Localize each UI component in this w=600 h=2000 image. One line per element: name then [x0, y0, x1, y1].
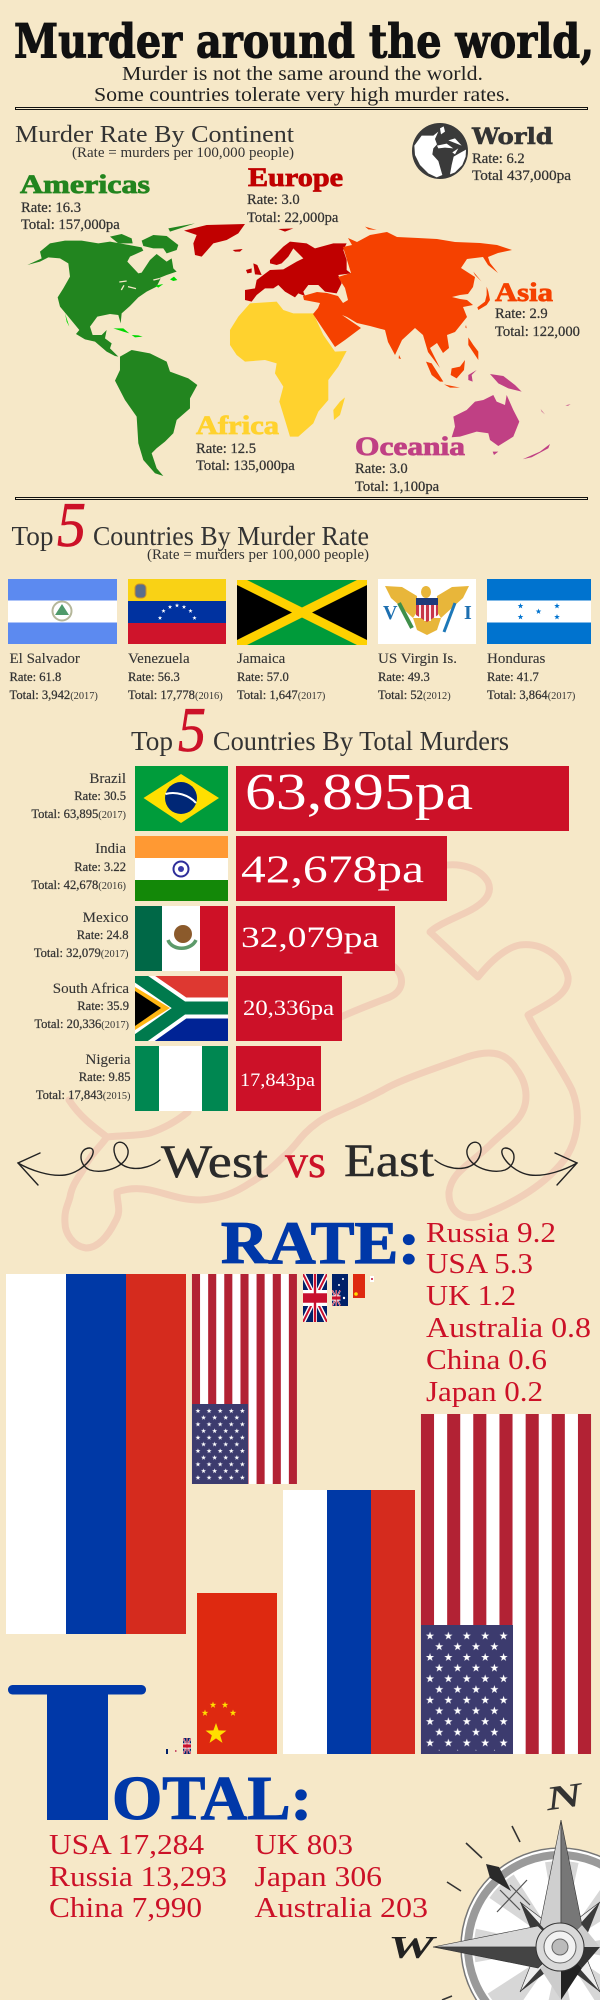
label: europe: Total: 22,000pa	[247, 210, 339, 226]
flag: nigeria	[135, 1046, 228, 1111]
label: mexico	[34, 910, 128, 960]
label: americas	[20, 170, 150, 233]
row: brazil	[31, 764, 569, 831]
bar: brazil: 63,895pa	[245, 764, 473, 821]
map: europe and africa	[184, 224, 351, 437]
list: total values: Russia 13,293	[49, 1862, 227, 1893]
stats: el salvador: El Salvador	[10, 651, 80, 667]
world stats	[471, 124, 572, 184]
label: brazil: Brazil	[89, 771, 126, 787]
stats: us virgin islands	[378, 651, 457, 702]
panel: murder rate by continent	[15, 122, 580, 495]
bar: india: 42,678pa	[241, 848, 424, 891]
stats: honduras	[487, 651, 575, 702]
label: asia: Rate: 2.9	[495, 306, 548, 322]
heading: top 5 total: 5	[178, 694, 206, 765]
label: americas: Rate: 16.3	[21, 200, 81, 216]
heading: total	[8, 1652, 312, 1862]
list: total values: Japan 306	[254, 1862, 382, 1893]
bar: india	[236, 836, 447, 901]
heading: top 5 rate: (Rate = murders per 100,000 people)	[147, 547, 369, 563]
subtitle: Some countries tolerate very high murder rates.	[94, 84, 510, 106]
world stats: World	[471, 124, 553, 150]
flag: japan rate	[370, 1276, 374, 1282]
stats: venezuela: Rate: 56.3	[128, 670, 180, 684]
label: africa: Africa	[196, 411, 279, 440]
arrow: right flourish	[435, 1142, 577, 1185]
stats: us virgin islands: Rate: 49.3	[378, 670, 430, 684]
map: americas	[27, 223, 197, 476]
label: oceania: Oceania	[355, 432, 465, 461]
icon: compass	[433, 1820, 600, 2000]
subtitle: Murder is not the same around the world.	[122, 63, 483, 85]
stats: venezuela: Total: 17,778(2016)	[128, 688, 223, 702]
heading: top 5 total: Countries By Total Murders	[213, 726, 509, 756]
flag: china rate	[353, 1274, 365, 1298]
flag: uk rate	[303, 1274, 327, 1322]
stats: honduras: Total: 3,864(2017)	[487, 688, 575, 702]
list: rate values	[426, 1218, 591, 1408]
label: asia: Asia	[495, 278, 553, 307]
label: india: Rate: 3.22	[74, 860, 126, 874]
label: africa: Rate: 12.5	[196, 441, 256, 457]
label: brazil	[31, 771, 126, 821]
bar: south africa	[236, 976, 342, 1041]
label: mexico: Mexico	[83, 910, 128, 926]
stats: el salvador: Total: 3,942(2017)	[10, 688, 98, 702]
label: brazil: Rate: 30.5	[74, 789, 126, 803]
label: mexico: Rate: 24.8	[77, 928, 128, 942]
label: americas: Americas	[20, 170, 150, 199]
label: nigeria: Total: 17,843(2015)	[36, 1088, 130, 1102]
stats: jamaica	[237, 651, 325, 702]
heading: west vs east: East	[344, 1135, 434, 1187]
stats: jamaica: Rate: 57.0	[237, 670, 289, 684]
bar: nigeria	[236, 1046, 321, 1111]
arrow: left flourish	[18, 1142, 160, 1185]
continent heading: (Rate = murders per 100,000 people)	[72, 145, 294, 161]
heading: west vs east	[161, 1135, 434, 1188]
heading: top 5 total: Top	[131, 726, 173, 756]
bar: south africa: 20,336pa	[243, 995, 334, 1020]
subtitle	[94, 63, 510, 106]
heading: west vs east: West	[161, 1136, 268, 1188]
flag: us virgin islands	[378, 579, 476, 644]
map: oceania	[452, 370, 571, 459]
label: nigeria: Rate: 9.85	[79, 1070, 130, 1084]
label: brazil: Total: 63,895(2017)	[31, 807, 126, 821]
label: south africa	[34, 981, 129, 1031]
list: rate values: China 0.6	[426, 1345, 547, 1376]
map: asia	[303, 227, 512, 388]
label: south africa: Rate: 35.9	[77, 999, 129, 1013]
world stats: Rate: 6.2	[472, 151, 525, 167]
stats: us virgin islands: US Virgin Is.	[378, 651, 457, 667]
label: asia: Total: 122,000	[495, 324, 580, 340]
label: oceania: Rate: 3.0	[355, 461, 408, 477]
icon: globe	[412, 123, 468, 179]
list: rate values: Australia 0.8	[426, 1313, 591, 1344]
compass letter N: N	[542, 1776, 587, 1818]
row: south africa	[34, 972, 342, 1045]
list: rate values: UK 1.2	[426, 1281, 516, 1312]
flag: mexico	[135, 906, 228, 971]
row: nigeria	[36, 1046, 321, 1111]
flag: uk total	[183, 1738, 191, 1754]
label: nigeria: Nigeria	[86, 1052, 131, 1068]
heading: top 5 rate: Top	[12, 521, 53, 551]
continent heading: Murder Rate By Continent	[15, 122, 294, 148]
label: europe: Europe	[248, 163, 343, 192]
list: total values: UK 803	[254, 1830, 353, 1861]
flag: india	[135, 836, 228, 901]
label: europe: Rate: 3.0	[247, 192, 300, 208]
panel: rate comparison	[6, 1210, 591, 1634]
list: total values	[49, 1830, 428, 1924]
flag: russia total	[283, 1490, 415, 1754]
world stats: Total 437,000pa	[472, 168, 572, 184]
list: total values: USA 17,284	[49, 1830, 204, 1861]
label: india	[31, 841, 126, 892]
stats: jamaica: Total: 1,647(2017)	[237, 688, 325, 702]
bar: mexico: 32,079pa	[241, 921, 379, 954]
stats: us virgin islands: Total: 52(2012)	[378, 688, 451, 702]
flag: brazil	[135, 766, 228, 831]
label: south africa: Total: 20,336(2017)	[34, 1017, 129, 1031]
flag: south africa	[131, 972, 228, 1045]
flag: australia rate	[332, 1274, 348, 1306]
flag: venezuela	[128, 579, 226, 644]
panel: total comparison	[8, 1414, 591, 1924]
list: rate values: USA 5.3	[426, 1249, 533, 1280]
continent heading	[15, 122, 294, 161]
label: nigeria	[36, 1052, 131, 1102]
label: africa: Total: 135,000pa	[196, 458, 295, 474]
bar: brazil	[236, 764, 569, 831]
row: mexico	[34, 906, 395, 971]
flag: jamaica	[237, 580, 367, 645]
bar: mexico	[236, 906, 395, 971]
compass letter W: W	[388, 1929, 438, 1965]
stats: venezuela	[128, 651, 223, 702]
map: africa	[230, 302, 347, 437]
bar: nigeria: 17,843pa	[240, 1070, 316, 1091]
heading: rate: RATE:	[221, 1210, 420, 1276]
flag: us virgin islands: I	[464, 602, 472, 624]
heading: top 5 rate	[12, 489, 369, 563]
label: oceania: Total: 1,100pa	[355, 479, 440, 495]
flag: australia total	[166, 1749, 168, 1754]
list: total values: China 7,990	[49, 1893, 202, 1924]
label: africa	[196, 411, 295, 474]
label: south africa: South Africa	[53, 981, 129, 997]
flag: el salvador	[8, 579, 117, 644]
flag: usa rate	[192, 1274, 297, 1484]
row: india	[31, 836, 447, 901]
label: oceania	[355, 432, 465, 495]
label: india: Total: 42,678(2016)	[31, 878, 126, 892]
heading: top 5 rate: Countries By Murder Rate	[93, 521, 369, 551]
flag: honduras	[487, 579, 591, 644]
heading: total: T	[50, 1652, 105, 1862]
label: mexico: Total: 32,079(2017)	[34, 946, 128, 960]
heading: west vs east: vs	[285, 1136, 326, 1188]
flag: china total	[197, 1593, 277, 1754]
flag: japan total	[175, 1750, 176, 1752]
flag: russia rate	[6, 1274, 186, 1634]
panel: top 5 by murder rate	[8, 489, 591, 702]
stats: honduras: Honduras	[487, 651, 545, 667]
world map	[27, 223, 571, 476]
stats: jamaica: Jamaica	[237, 651, 286, 667]
flag: us virgin islands: V	[383, 602, 398, 624]
heading: total: OTAL:	[112, 1765, 312, 1833]
flag: usa total	[421, 1414, 591, 1754]
panel: top 5 by total murders	[31, 694, 569, 1111]
list: rate values: Russia 9.2	[426, 1218, 556, 1249]
chalk body outline	[65, 865, 577, 1248]
list: rate values: Japan 0.2	[426, 1377, 543, 1408]
stats: honduras: Rate: 41.7	[487, 670, 539, 684]
heading: top 5 rate: 5	[57, 489, 86, 560]
stats: el salvador	[10, 651, 98, 702]
label: europe	[247, 163, 343, 226]
label: asia	[495, 278, 580, 340]
stats: el salvador: Rate: 61.8	[10, 670, 61, 684]
heading: top 5 total	[131, 694, 509, 765]
list: total values: Australia 203	[254, 1893, 428, 1924]
stats: venezuela: Venezuela	[128, 651, 190, 667]
label: india: India	[95, 841, 126, 857]
label: americas: Total: 157,000pa	[21, 217, 120, 233]
